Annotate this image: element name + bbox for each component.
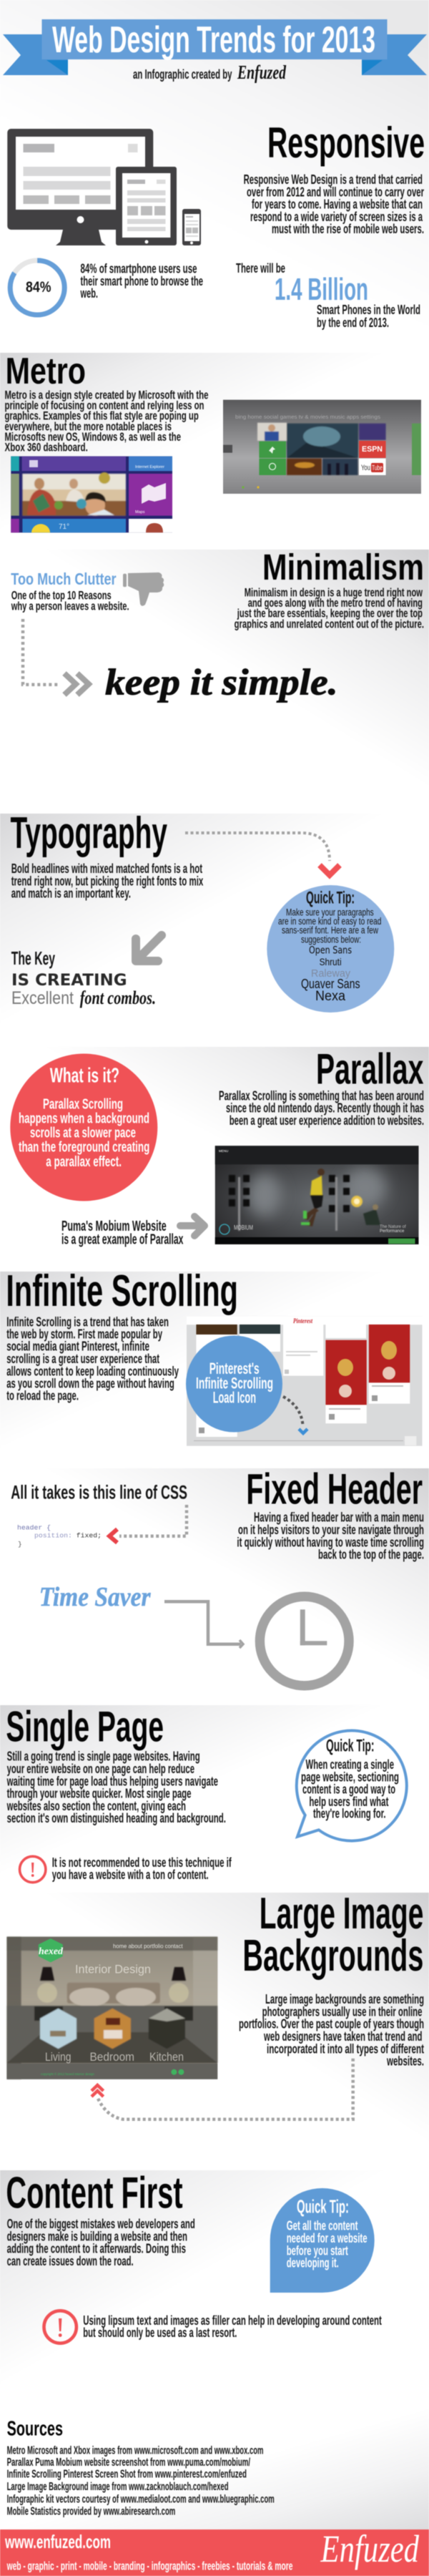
- heading: Content First: Content First: [6, 2169, 183, 2218]
- callout: pinterest load icon: Load Icon: [213, 1389, 256, 1407]
- callout: quick tip drop: developing it.: [287, 2256, 339, 2270]
- callout: what is it: scrolls at a slower pace: [30, 1125, 136, 1141]
- text: infinite scrolling description: as you scroll down the page without having: [6, 1376, 174, 1390]
- text: warning note: It is not recommended to use this technique if: [52, 1855, 232, 1870]
- icon: responsive devices: [7, 129, 201, 245]
- image: xbox 360 dashboard: You: [361, 464, 370, 472]
- text: source list: Metro Microsoft and Xbox images from www.microsoft.com and www.xbox.com: [7, 2444, 263, 2457]
- text: single page description: websites also section the content, giving each: [6, 1799, 186, 1813]
- text: single page description: section it's own distinguished heading and background.: [7, 1811, 226, 1825]
- text: lipsum note: [83, 2313, 382, 2340]
- text: metro description: Xbox 360 dashboard.: [4, 441, 88, 454]
- image: xbox 360 dashboard: bing home social games tv & movies music apps settings: [235, 415, 381, 420]
- text: minimalism description: [235, 586, 424, 630]
- text: infinite scrolling description: scrolling is a great user experience that: [6, 1352, 159, 1366]
- text: the key is creating excellent font combos: IS CREATING: [11, 972, 127, 990]
- panel: large image backgrounds: [0, 1889, 429, 2170]
- text: infinite scrolling description: [6, 1314, 179, 1403]
- image: puma mobium website: MOBIUM: [234, 1224, 253, 1231]
- callout: quick tip speech bubble: they're looking for.: [313, 1807, 386, 1821]
- text: single page description: through your website quicker. Most single page: [7, 1787, 191, 1801]
- image: hexed interior design website: hexed: [39, 1946, 64, 1957]
- callout: quick tip drop: needed for a website: [287, 2231, 368, 2245]
- image: xbox 360 dashboard: [223, 400, 421, 494]
- text: typography description: Bold headlines with mixed matched fonts is a hot: [11, 862, 202, 876]
- text: infinite scrolling description: Infinite Scrolling is a trend that has taken: [6, 1314, 169, 1329]
- text: infinite scrolling description: social media giant Pinterest, infinite: [6, 1340, 149, 1354]
- callout: what is it: What is it?: [50, 1065, 119, 1088]
- text: smartphone statistic: [80, 262, 203, 301]
- text: metro description: [4, 389, 209, 454]
- panel: content first: [0, 2169, 429, 2408]
- text: source list: Large Image Background image from www.zacknoblauch.com/hexed: [7, 2481, 228, 2493]
- callout: what is it: than the foreground creating: [19, 1140, 149, 1156]
- text: smartphone statistic: 84% of smartphone users use: [80, 262, 197, 276]
- text: metro description: Microsofts new OS, Windows 8, as well as the: [4, 431, 181, 444]
- text: single page description: your entire website on one page can help reduce: [7, 1762, 194, 1776]
- heading: Single Page: Single Page: [6, 1702, 164, 1750]
- callout: quick tip font suggestions: are in some kind of easy to read: [278, 916, 381, 927]
- panel: infinite scrolling: [0, 1267, 429, 1468]
- text: puma caption: Puma's Mobium Website: [61, 1219, 167, 1234]
- byline: [133, 62, 286, 83]
- arrow: to puma screenshot: [180, 1216, 204, 1236]
- text: lipsum note: but should only be used as a last resort.: [83, 2326, 237, 2340]
- text: content first description: [7, 2217, 195, 2268]
- callout: too much clutter: One of the top 10 Reasons: [11, 590, 112, 602]
- icon: warning: [20, 1856, 46, 1883]
- code snippet: header {: [17, 1523, 51, 1531]
- code snippet: position: fixed;: [34, 1532, 102, 1540]
- image: puma mobium website: The Nature of: [380, 1225, 406, 1229]
- text: smartphone statistic: their smart phone to browse the: [80, 274, 203, 288]
- callout: quick tip font suggestions: sans-serif font. Here are a few: [282, 925, 378, 936]
- text: smartphone statistic: web.: [80, 286, 98, 301]
- image: puma mobium website: [215, 1146, 419, 1244]
- text: metro description: principle of focusing on content and relying less on: [4, 399, 204, 412]
- callout: too much clutter: [11, 570, 129, 613]
- callout: quick tip drop: Get all the content: [287, 2219, 358, 2233]
- text: responsive description: [244, 172, 424, 236]
- callout: too much clutter: Too Much Clutter: [11, 570, 117, 588]
- icon: thumbs down: [123, 572, 164, 606]
- text: typography description: trend right now, but picking the right fonts to mix: [11, 874, 203, 888]
- panel: single page: [0, 1702, 429, 1893]
- panel: metro: [0, 351, 429, 550]
- chart: 84% donut: 84%: [26, 279, 51, 296]
- panel: fixed header: [0, 1465, 429, 1705]
- heading: Large Image Backgrounds: [242, 1889, 423, 1981]
- callout: quick tip font suggestions: Nexa: [315, 989, 345, 1004]
- title banner: [3, 19, 427, 75]
- callout: pinterest load icon: Pinterest's: [209, 1360, 260, 1377]
- text: source list: Mobile Statistics provided by www.abiresearch.com: [7, 2505, 175, 2517]
- text: content first description: adding the content to it afterwards. Doing this: [7, 2242, 186, 2256]
- byline: Enfuzed: [237, 62, 286, 83]
- arrow: connector to clock: [164, 1601, 243, 1648]
- section: header and responsive: [0, 0, 429, 353]
- callout: quick tip drop: Quick Tip:: [297, 2196, 349, 2218]
- image: puma mobium website: Performance: [380, 1229, 405, 1234]
- heading: Typography: Typography: [10, 809, 167, 858]
- heading: Sources: Sources: [7, 2417, 63, 2440]
- callout: quick tip font suggestions: Quick Tip:: [306, 889, 355, 908]
- code snippet: [17, 1523, 102, 1548]
- image: pinterest screenshot: [187, 1316, 422, 1446]
- text: puma caption: is a great example of Parallax: [61, 1232, 183, 1248]
- text: parallax description: [219, 1088, 424, 1128]
- text: time saver: Time Saver: [39, 1582, 152, 1612]
- text: single page description: Still a going trend is single page websites. Having: [7, 1750, 200, 1764]
- image: hexed interior design website: Kitchen: [149, 2050, 184, 2064]
- image: hexed interior design website: [7, 1937, 217, 2079]
- callout: quick tip font suggestions: Make sure your paragraphs: [286, 907, 374, 917]
- heading: Infinite Scrolling: Infinite Scrolling: [6, 1267, 238, 1316]
- panel: typography: [0, 809, 429, 1047]
- panel: minimalism: [0, 547, 429, 814]
- arrow: down-left: [136, 935, 162, 961]
- callout: quick tip font suggestions: suggestions below:: [301, 934, 361, 945]
- callout: 1.4 billion: [236, 261, 420, 330]
- text: metro description: everywhere, but the more notable places is: [4, 420, 172, 433]
- image: hexed interior design website: Bedroom: [90, 2050, 134, 2064]
- icon: clock: [260, 1596, 349, 1686]
- text: the key is creating excellent font combos: [11, 947, 156, 1008]
- text: metro description: graphics. Examples of this flat style are poping up: [4, 410, 199, 423]
- text: infinite scrolling description: allows content to keep loading continuously: [6, 1364, 179, 1378]
- text: large image description: [239, 1992, 424, 2069]
- panel: sources: [0, 2408, 429, 2529]
- text: the key is creating excellent font combos: Excellent: [11, 988, 74, 1008]
- callout: what is it: happens when a background: [19, 1111, 149, 1126]
- text: metro description: Metro is a design style created by Microsoft with the: [4, 389, 209, 401]
- callout: quick tip font suggestions: Raleway: [311, 967, 350, 980]
- image: xbox 360 dashboard: ESPN: [362, 445, 383, 454]
- callout: quick tip font suggestions: Shruti: [320, 956, 342, 967]
- text: content first description: designers make is building a website and then: [7, 2229, 187, 2243]
- text: source list: Parallax Puma Mobium website screenshot from www.puma.com/mobium/: [7, 2457, 250, 2469]
- arrow: dotted connector to quick tip: [185, 833, 340, 875]
- image: xbox 360 dashboard: Tube: [372, 464, 383, 472]
- heading: Metro: Metro: [6, 351, 86, 392]
- callout: quick tip drop: before you start: [287, 2243, 348, 2258]
- image: pinterest screenshot: Pinterest: [293, 1317, 312, 1324]
- byline: an Infographic created by: [133, 67, 232, 82]
- text: warning note: [52, 1855, 232, 1882]
- callout: what is it: Parallax Scrolling: [43, 1096, 123, 1112]
- callout: quick tip font suggestions: [267, 885, 394, 1013]
- text: source list: Infinite Scrolling Pinterest Screen Shot from www.pinterest.com/enfuzed: [7, 2469, 247, 2481]
- image: hexed interior design website: Interior Design: [75, 1962, 151, 1976]
- text: warning note: you have a website with a ton of content.: [52, 1868, 209, 1882]
- callout: what is it: [10, 1053, 157, 1201]
- text: the key is creating excellent font combos: font combos.: [80, 987, 156, 1008]
- callout: what is it: a parallax effect.: [46, 1154, 122, 1170]
- text: infinite scrolling description: the web by storm. First made popular by: [6, 1327, 162, 1342]
- image: hexed interior design website: home about portfolio contact: [113, 1942, 183, 1949]
- text: fixed header description: [237, 1511, 424, 1561]
- chart: 84% donut: [10, 260, 64, 315]
- arrow: dotted to code: [109, 1505, 187, 1543]
- text: source list: [7, 2444, 275, 2517]
- footer: [0, 2527, 429, 2576]
- code snippet: }: [18, 1541, 22, 1548]
- callout: pinterest load icon: [186, 1335, 282, 1433]
- arrow: dotted up to website image: [92, 2059, 353, 2119]
- icon: warning: [44, 2311, 77, 2343]
- text: typography description: and match is an important key.: [11, 887, 131, 901]
- text: typography description: [11, 862, 203, 901]
- callout: 1.4 billion: 1.4 Billion: [275, 272, 368, 307]
- callout: quick tip speech bubble: [297, 1731, 407, 1841]
- arrow: dotted to load icon: [283, 1397, 307, 1433]
- callout: pinterest load icon: Infinite Scrolling: [196, 1375, 273, 1392]
- callout: 1.4 billion: There will be: [236, 261, 285, 275]
- arrow: dotted connector to keep it simple: [23, 619, 89, 695]
- text: single page description: [6, 1750, 226, 1825]
- callout: quick tip font suggestions: Quaver Sans: [301, 977, 360, 991]
- image: hexed interior design website: copyright © 2012 hexed interior design: [41, 2072, 94, 2076]
- image: hexed interior design website: Living: [45, 2050, 72, 2064]
- panel: parallax: [0, 1045, 429, 1272]
- image: windows 8 start screen: Maps: [135, 510, 145, 514]
- image: puma mobium website: MENU: [219, 1149, 228, 1153]
- callout: too much clutter: why a person leaves a website.: [11, 600, 129, 613]
- image: windows 8 start screen: [11, 457, 172, 532]
- text: puma caption: [61, 1219, 183, 1248]
- text: content first description: can create issues down the road.: [7, 2254, 134, 2268]
- footer url: www.enfuzed.com: [4, 2531, 111, 2552]
- text: all it takes: All it takes is this line of CSS: [11, 1481, 187, 1503]
- callout: quick tip speech bubble: Quick Tip:: [326, 1736, 375, 1755]
- text: single page description: waiting time for page load thus helping users navigate: [6, 1774, 218, 1788]
- callout: quick tip font suggestions: Open Sans: [309, 945, 352, 957]
- text: infinite scrolling description: to reload the page.: [6, 1389, 79, 1403]
- image: windows 8 start screen: 71°: [59, 523, 69, 531]
- slogan: keep it simple: keep it simple.: [105, 663, 338, 703]
- text: the key is creating excellent font combos: The Key: [11, 947, 55, 969]
- callout: quick tip drop: [270, 2188, 375, 2293]
- text: content first description: One of the biggest mistakes web developers and: [7, 2217, 195, 2231]
- image: windows 8 start screen: Internet Explorer: [135, 465, 164, 469]
